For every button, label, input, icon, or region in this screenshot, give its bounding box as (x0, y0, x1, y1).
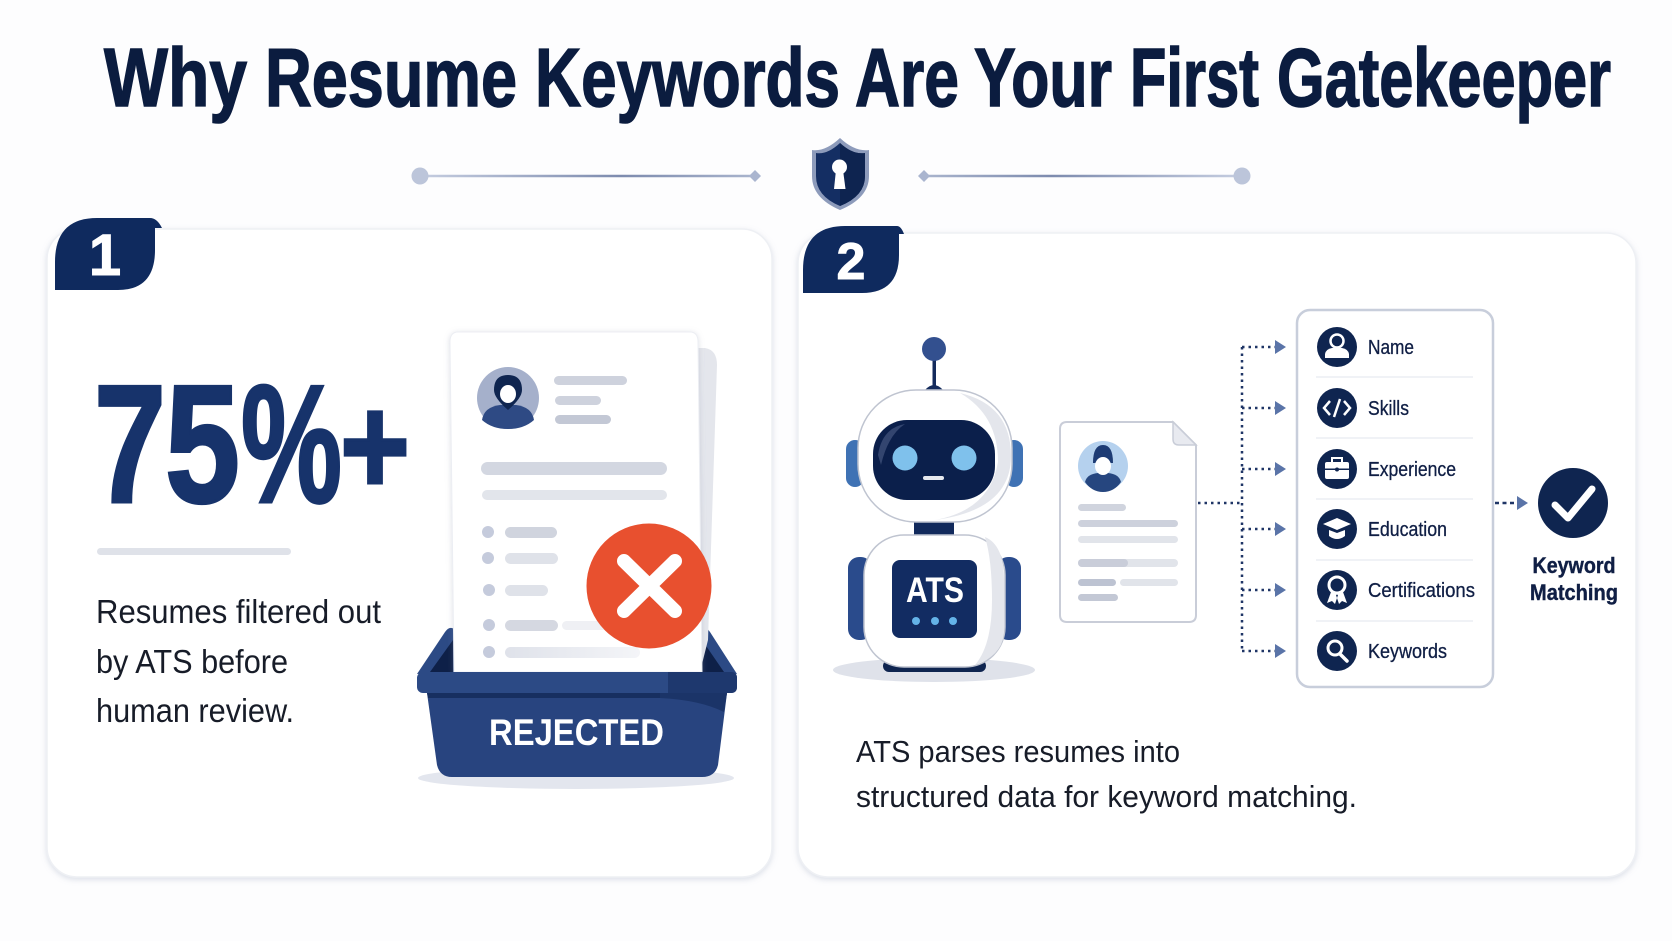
field: keywords: Keywords (1368, 641, 1447, 663)
label: rejected: REJECTED (489, 712, 664, 753)
field: keywords (1317, 631, 1447, 671)
parsing description (856, 734, 1357, 814)
illustration: ATS robot (833, 337, 1035, 682)
big statistic: + (340, 367, 410, 524)
title: Your (974, 31, 1112, 124)
title (104, 31, 1611, 124)
illustration: rejected resume in bin (417, 332, 737, 789)
title: Are (855, 31, 959, 124)
badge 2 (803, 226, 904, 293)
badge 2: 2 (837, 233, 865, 291)
title: First (1130, 31, 1259, 124)
label: keyword matching: Matching (1530, 580, 1618, 605)
big statistic: % (241, 350, 342, 538)
label: ATS: ATS (906, 571, 964, 610)
label: keyword matching: Keyword (1532, 553, 1616, 578)
badge 1: 1 (89, 223, 121, 288)
big statistic: 7 (94, 350, 166, 538)
parsing description: structured data for keyword matching. (856, 779, 1357, 814)
title divider with shield icon (412, 138, 1250, 210)
statistic description (96, 593, 381, 729)
field: certifications: Certifications (1368, 580, 1475, 602)
icon: shield keyhole (812, 138, 869, 210)
field: experience (1317, 449, 1456, 489)
field: education: Education (1368, 519, 1447, 541)
bin front (417, 672, 737, 777)
resume page (450, 332, 702, 672)
arrow to keyword matching (1495, 496, 1528, 510)
field: skills (1317, 388, 1409, 428)
statistic description: Resumes filtered out (96, 593, 381, 630)
field: skills: Skills (1368, 398, 1409, 420)
badge 1 (55, 218, 162, 290)
field: education (1317, 509, 1447, 549)
field: experience: Experience (1368, 459, 1456, 481)
title: Keywords (535, 31, 840, 124)
title: Why (104, 31, 247, 124)
big statistic: 5 (165, 350, 240, 538)
field: name (1317, 327, 1414, 367)
panel: parsing (798, 226, 1636, 877)
title: Resume (265, 31, 517, 124)
statistic description: human review. (96, 692, 294, 729)
big statistic (94, 350, 410, 538)
icon: keyword matching check (1538, 468, 1608, 538)
statistic description: by ATS before (96, 643, 288, 680)
icon: red x (586, 524, 712, 648)
resume document (1060, 422, 1196, 622)
field: certifications (1317, 570, 1475, 610)
label: keyword matching (1530, 553, 1618, 605)
panel: statistic (47, 218, 772, 877)
parsing description: ATS parses resumes into (856, 734, 1180, 769)
statistic underline (97, 548, 291, 555)
card: parsed fields (1297, 310, 1493, 687)
field: name: Name (1368, 337, 1414, 359)
dotted connector arrows (1198, 340, 1286, 658)
